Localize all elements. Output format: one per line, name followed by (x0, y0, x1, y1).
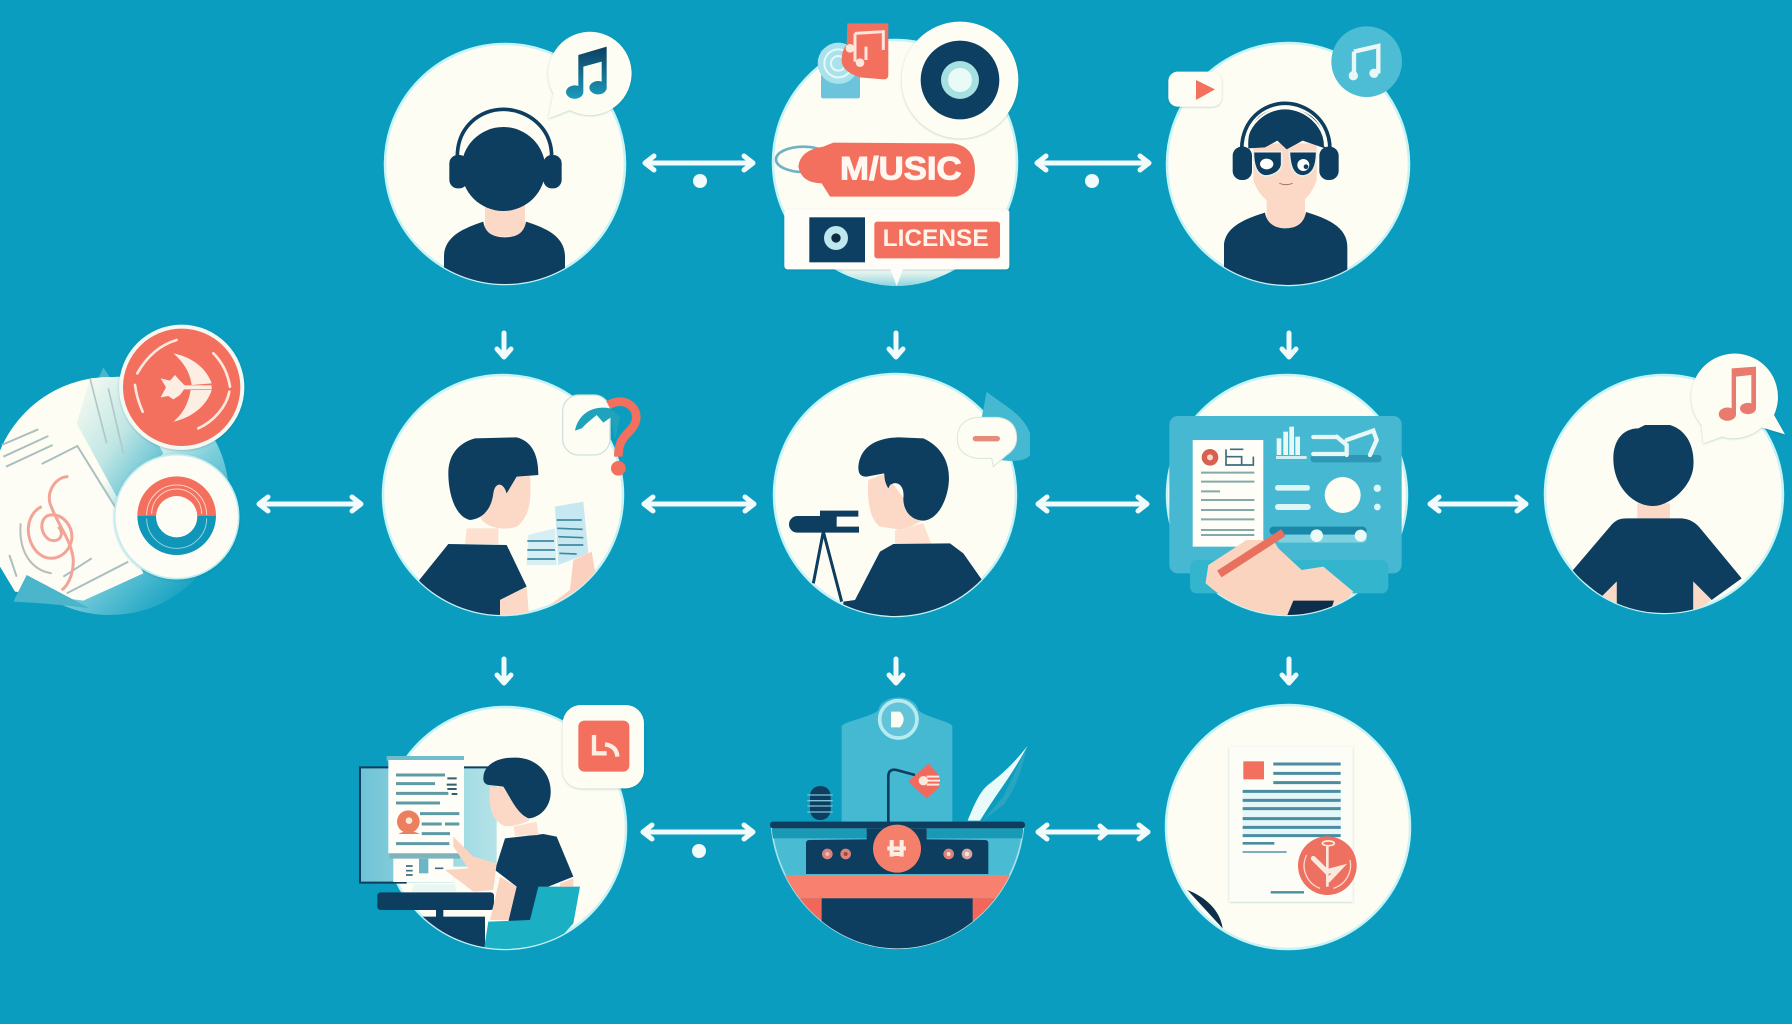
chart and controls (1269, 427, 1382, 543)
document (1229, 747, 1353, 902)
figure: listener (444, 109, 565, 290)
arrow: dashboard to back view (1430, 497, 1526, 511)
figure: person with papers (419, 437, 596, 620)
node: music license (773, 22, 1018, 286)
document on dashboard (1193, 440, 1263, 547)
node: contract dashboard (1167, 375, 1407, 623)
arrows: connectors (259, 156, 1526, 858)
icon: speech bubble minus (957, 392, 1030, 467)
node: person at computer (360, 705, 644, 957)
icon: red seal (1298, 836, 1357, 895)
tag: MUSIC (776, 143, 975, 197)
icon: play pill (1168, 72, 1222, 107)
figure: person at tripod camera (789, 437, 987, 623)
arrow: listener to license (645, 156, 753, 188)
bowl: console (770, 822, 1025, 952)
icon: teal disc tile (818, 43, 860, 98)
arrow: camera to dashboard (1038, 497, 1147, 511)
icon: quill (968, 746, 1027, 821)
arrow: down col 2 row 2 (889, 659, 903, 683)
icon: red note bubble (1691, 354, 1785, 443)
arrow: desk to contract (1038, 825, 1148, 839)
monitor and document (360, 756, 497, 892)
card: LICENSE (784, 209, 1009, 286)
arrow: computer to desk (643, 825, 753, 858)
arrow: down col 3 row 2 (1282, 659, 1296, 683)
node: listener with glasses (1167, 26, 1409, 287)
arrow: down col 3 row 1 (1282, 333, 1296, 357)
node: person reading with question (383, 375, 636, 620)
dark corner (1187, 890, 1223, 928)
node: signed contract (1166, 705, 1410, 949)
icon: red plane badge (119, 325, 244, 450)
icon: teal note badge (1331, 26, 1402, 97)
icon: music note bubble (548, 32, 632, 118)
arrow: down col 1 row 1 (497, 333, 511, 357)
node: person from behind (1545, 354, 1785, 617)
hand writing (1205, 533, 1353, 623)
desk base and chair (422, 834, 580, 949)
arrow: license to glasses listener (1037, 156, 1149, 188)
icon: split record (115, 455, 239, 579)
icon: question bubble (563, 395, 636, 476)
node: listener with headphones (385, 32, 632, 290)
card: LICENSE: LICENSE (883, 225, 989, 252)
icon: red music file (842, 23, 888, 79)
arrow: person to camera (644, 497, 754, 511)
figure: person head and hands (445, 758, 551, 892)
figure: back view (1572, 425, 1742, 617)
pale base of circle (840, 268, 953, 286)
node: sheets and record (0, 325, 244, 615)
icon: vinyl record (902, 22, 1018, 138)
node: recording desk (770, 697, 1027, 952)
figure: person with glasses (1224, 103, 1347, 287)
panel: paper circle (0, 367, 229, 615)
arrow: down col 2 row 1 (889, 333, 903, 357)
tag: MUSIC: M/USIC (840, 150, 962, 186)
desk (377, 892, 494, 917)
node: person with camera (774, 374, 1030, 623)
sheet with treble clef (0, 429, 143, 608)
icon: microphone (807, 786, 833, 820)
icon: red square badge (563, 705, 644, 788)
panel: dashboard (1169, 416, 1402, 593)
tag panel (842, 697, 952, 822)
icon: desk lamp (888, 763, 940, 823)
arrow: down col 1 row 2 (497, 659, 511, 683)
arrow: sheets to person (259, 497, 361, 511)
